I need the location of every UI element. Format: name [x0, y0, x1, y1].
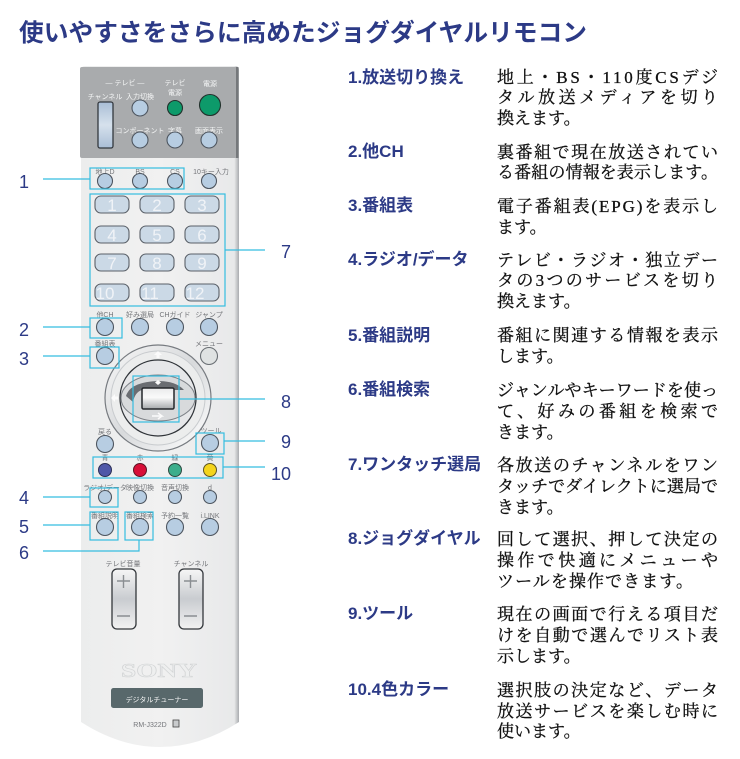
- item 6: て、好みの番組を検索で: [497, 402, 718, 421]
- item 10: 放送サービスを楽しむ時に: [497, 702, 718, 721]
- program buttons: ジャンプ: [195, 311, 223, 319]
- item 6: [348, 380, 718, 442]
- top control panel: 画面表示: [195, 126, 223, 135]
- lower buttons: ラジオ/データ: [83, 483, 127, 492]
- item 2: [348, 142, 718, 182]
- broadcast buttons: 10キー入力: [193, 167, 229, 176]
- item 3: ます。: [497, 218, 547, 237]
- item 8: ツールを操作できます。: [497, 572, 693, 591]
- remote body: [81, 66, 239, 747]
- program buttons: メニュー: [195, 341, 223, 348]
- item 9: [348, 604, 718, 666]
- top control panel: — テレビ —: [106, 78, 144, 87]
- number keys: 11: [141, 284, 159, 303]
- number keys: [95, 196, 219, 303]
- top control panel: 電源: [203, 79, 217, 88]
- item 4: タの3つのサービスを切り: [497, 271, 718, 290]
- number keys: 10: [96, 284, 114, 303]
- remote control: [80, 66, 239, 747]
- item 7: きます。: [497, 498, 564, 517]
- broadcast buttons: [95, 167, 229, 188]
- number keys: 9: [197, 254, 207, 273]
- digital tuner badge: デジタルチューナー: [126, 695, 188, 704]
- item 1: [348, 68, 718, 128]
- lower buttons: [83, 483, 220, 536]
- number keys: 1: [107, 196, 117, 215]
- callout numbers: 1: [19, 172, 29, 192]
- lower buttons: 映像切換: [126, 483, 154, 492]
- title: 使いやすさをさらに高めたジョグダイヤルリモコン: [19, 18, 587, 47]
- item 9: 現在の画面で行える項目だ: [497, 605, 718, 624]
- lower buttons: 番組説明: [91, 511, 119, 520]
- model number: RM-J322D: [133, 722, 167, 729]
- model number: [133, 720, 179, 729]
- item 5: します。: [497, 347, 564, 366]
- return and tool buttons: 戻る: [98, 428, 112, 436]
- top control panel: 電源: [168, 88, 182, 97]
- number keys: 6: [197, 226, 207, 245]
- item 3: 電子番組表(EPG)を表示し: [497, 197, 718, 216]
- item 7: 各放送のチャンネルをワン: [497, 456, 718, 475]
- lower buttons: i.LINK: [200, 513, 220, 520]
- item 3: 3.番組表: [348, 196, 413, 215]
- callout numbers: 3: [19, 349, 29, 369]
- volume and channel rockers: チャンネル: [174, 560, 208, 568]
- top control panel: 字幕: [168, 126, 182, 135]
- number keys: 3: [197, 196, 207, 215]
- item 6: ジャンルやキーワードを使っ: [497, 381, 718, 400]
- program buttons: 他CH: [96, 310, 114, 319]
- program buttons: CHガイド: [159, 310, 191, 319]
- item 8: 8.ジョグダイヤル: [348, 528, 481, 548]
- color buttons: 青: [102, 453, 108, 462]
- callout numbers: 5: [19, 517, 29, 537]
- callout numbers: 4: [19, 488, 29, 508]
- item 2: 2.他CH: [348, 142, 404, 161]
- item 5: 番組に関連する情報を表示: [497, 326, 719, 345]
- callout numbers: 2: [19, 320, 29, 340]
- color buttons: 黄: [206, 453, 214, 462]
- item 1: 換えます。: [497, 109, 581, 128]
- number keys: 12: [186, 284, 204, 303]
- number keys: 4: [107, 226, 117, 245]
- callout numbers: 7: [281, 242, 291, 262]
- callout numbers: 6: [19, 543, 29, 563]
- item 6: きます。: [497, 423, 564, 442]
- broadcast buttons: 地上D: [95, 167, 115, 176]
- callout numbers: 8: [281, 392, 291, 412]
- callout numbers: 10: [271, 464, 291, 484]
- return and tool buttons: [96, 428, 222, 452]
- lower buttons: 予約一覧: [161, 511, 189, 520]
- top control panel: チャンネル: [88, 93, 122, 101]
- item 3: [348, 196, 718, 237]
- top control panel: 入力切換: [126, 92, 154, 101]
- item 1: 地上・BS・110度CSデジ: [497, 68, 718, 87]
- item 6: 6.番組検索: [348, 380, 430, 399]
- item 2: る番組の情報を表示します。: [497, 163, 718, 182]
- digital tuner badge: [111, 688, 203, 708]
- item 1: 1.放送切り換え: [348, 68, 464, 87]
- item 9: 9.ツール: [348, 604, 413, 623]
- number keys: 5: [152, 226, 162, 245]
- item 8: 操作で快適にメニューや: [497, 551, 718, 570]
- color buttons: 緑: [172, 453, 178, 462]
- top control panel: コンポーネント: [116, 127, 164, 135]
- broadcast buttons: CS: [170, 169, 180, 176]
- item 4: 換えます。: [497, 292, 581, 311]
- callout boxes and leader lines: [43, 168, 265, 551]
- item 4: [348, 249, 718, 311]
- volume and channel rockers: [106, 559, 208, 629]
- item 4: 4.ラジオ/データ: [348, 249, 469, 269]
- lower buttons: d: [208, 485, 212, 492]
- item 8: 回して選択、押して決定の: [497, 530, 718, 549]
- item 10: 10.4色カラー: [348, 679, 449, 699]
- item 7: タッチでダイレクトに選局で: [497, 477, 718, 496]
- item 1: タル放送メディアを切り: [497, 88, 718, 107]
- item 5: [348, 326, 719, 366]
- brand logo: SONY: [121, 660, 198, 682]
- color buttons: 赤: [136, 454, 144, 462]
- callout numbers: 9: [281, 432, 291, 452]
- broadcast buttons: BS: [135, 169, 145, 176]
- lower buttons: 番組検索: [126, 511, 154, 520]
- item 9: 示します。: [497, 647, 581, 666]
- item 10: 使います。: [497, 722, 581, 741]
- top control panel: [80, 67, 238, 158]
- number keys: 8: [152, 254, 162, 273]
- item 10: [348, 679, 718, 741]
- program buttons: [94, 310, 223, 364]
- color buttons: [98, 453, 216, 476]
- item 10: 選択肢の決定など、データ: [497, 681, 718, 700]
- number keys: 2: [152, 196, 162, 215]
- item 7: [348, 455, 718, 517]
- program buttons: 好み選局: [126, 310, 154, 319]
- return and tool buttons: ツール: [200, 428, 222, 435]
- item 7: 7.ワンタッチ選局: [348, 455, 481, 474]
- top control panel: テレビ: [164, 78, 186, 87]
- item 4: テレビ・ラジオ・独立デー: [497, 251, 718, 270]
- item 9: けを自動で選んでリスト表: [497, 626, 718, 645]
- volume and channel rockers: テレビ音量: [106, 559, 140, 568]
- lower buttons: 音声切換: [161, 483, 189, 492]
- number keys: 7: [107, 254, 117, 273]
- jog dial: [105, 345, 211, 451]
- program buttons: 番組表: [94, 339, 116, 348]
- callout numbers: [19, 172, 291, 563]
- item 8: [348, 528, 718, 591]
- item 2: 裏番組で現在放送されてい: [497, 143, 718, 162]
- item 5: 5.番組説明: [348, 326, 430, 345]
